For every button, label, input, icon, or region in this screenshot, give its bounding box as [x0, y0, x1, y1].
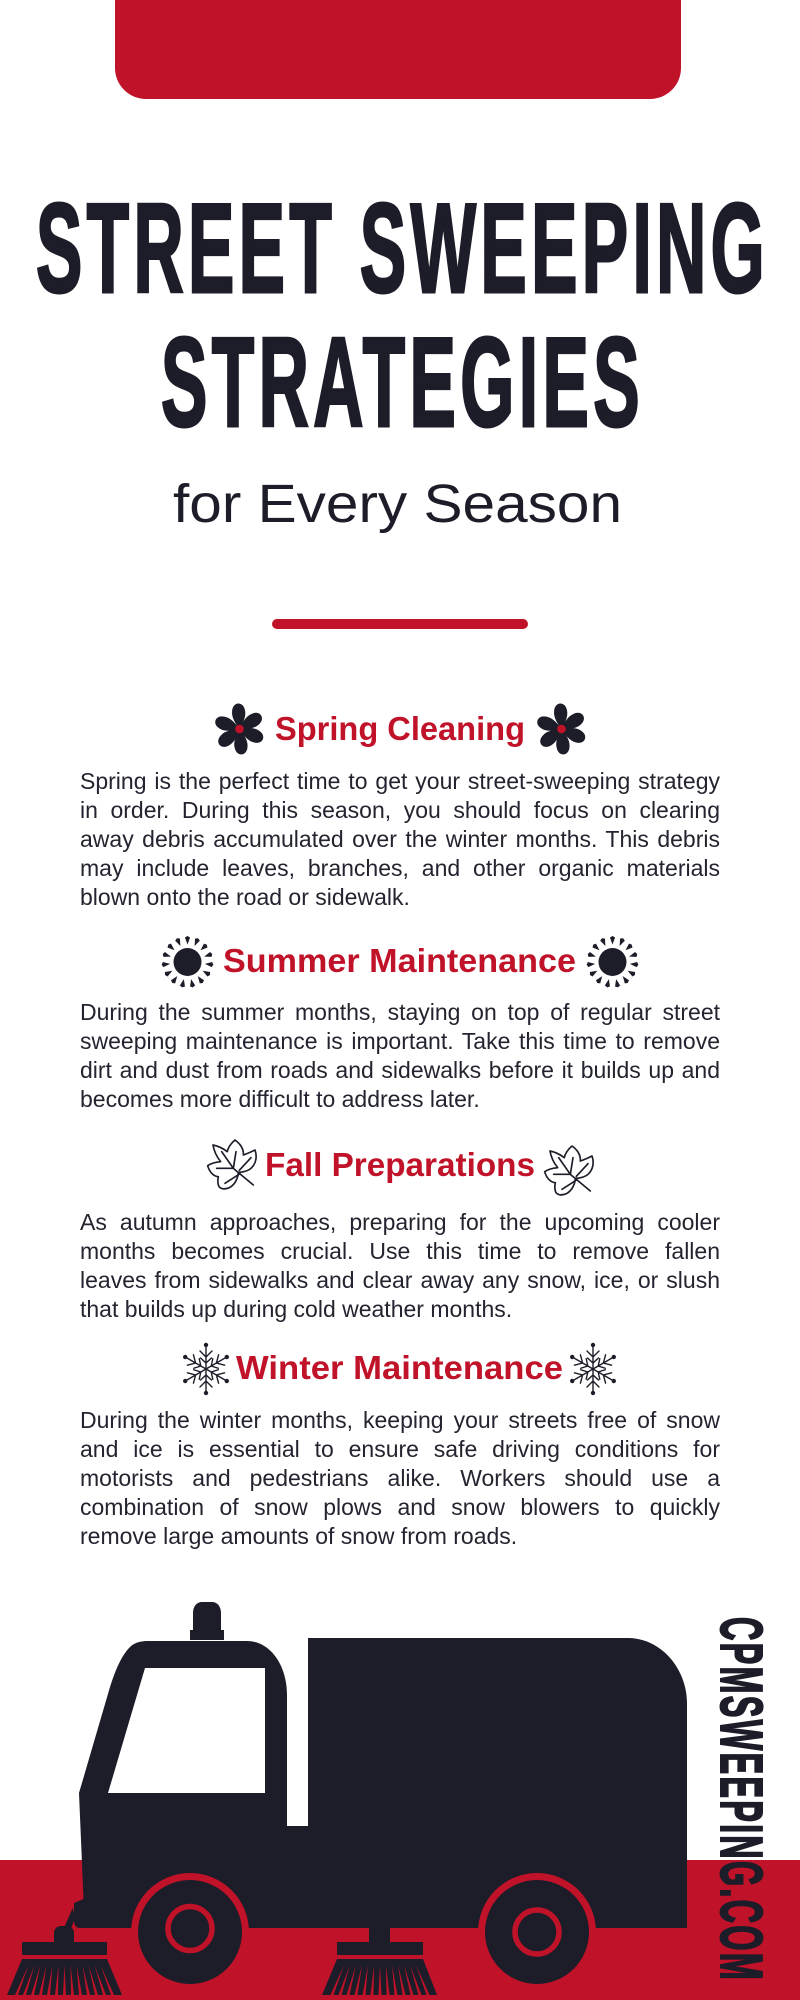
text block: fall: leaves from sidewalks and clear away any snow, ice, or slush	[80, 1267, 720, 1293]
icon: leaf right	[545, 1146, 593, 1195]
icon: sun right	[586, 936, 639, 988]
heading: Spring Cleaning: Spring Cleaning	[275, 710, 525, 747]
truck beacon	[190, 1602, 224, 1640]
middle brush	[322, 1926, 437, 1995]
text block: summer: sweeping maintenance is important. Take this time to remove	[80, 1028, 720, 1054]
title	[36, 177, 769, 453]
icon: snowflake right	[567, 1343, 619, 1395]
subtitle: for Every Season	[173, 474, 622, 534]
text block: winter: combination of snow plows and snow blowers to quickly	[80, 1494, 720, 1520]
text block: spring: in order. During this season, you should focus on clearing	[80, 797, 720, 823]
heading: Summer Maintenance: Summer Maintenance	[223, 942, 576, 979]
icon: flower right	[535, 703, 588, 755]
text block: summer: dirt and dust from roads and sidewalks before it builds up and	[80, 1057, 720, 1083]
heading: Winter Maintenance: Winter Maintenance	[236, 1349, 563, 1386]
text block: fall: that builds up during cold weather months.	[80, 1296, 512, 1322]
icon: flower left	[213, 703, 266, 755]
icon: snowflake left	[180, 1343, 232, 1395]
sweeper truck	[7, 1602, 687, 1995]
top red tab	[115, 0, 681, 99]
text block: winter	[80, 1407, 720, 1549]
text block: winter: remove large amounts of snow from roads.	[80, 1523, 517, 1549]
text block: fall: As autumn approaches, preparing for the upcoming cooler	[80, 1209, 720, 1235]
front wheel	[131, 1873, 249, 1991]
text block: spring: away debris accumulated over the winter months. This debris	[80, 826, 720, 852]
text block: summer: During the summer months, staying on top of regular street	[80, 999, 720, 1025]
text block: spring: may include leaves, branches, and other organic materials	[80, 855, 720, 881]
icon: sun left	[161, 936, 214, 988]
text block: spring: Spring is the perfect time to get your street-sweeping strategy	[80, 768, 720, 794]
red ground band	[0, 1860, 800, 2000]
text block: spring: blown onto the road or sidewalk.	[80, 884, 410, 910]
text block: winter: During the winter months, keeping your streets free of snow	[80, 1407, 720, 1433]
text block: winter: and ice is essential to ensure safe driving conditions for	[80, 1436, 720, 1462]
text block: winter: motorists and pedestrians alike. Workers should use a	[80, 1465, 720, 1491]
text block: fall: months becomes crucial. Use this time to remove fallen	[80, 1238, 720, 1264]
divider	[272, 619, 528, 629]
heading: Fall Preparations: Fall Preparations	[265, 1146, 535, 1183]
text block: spring	[80, 768, 720, 910]
text block: summer: becomes more difficult to address later.	[80, 1086, 480, 1112]
truck body and cab	[74, 1638, 687, 1928]
icon: leaf left	[208, 1140, 256, 1189]
text block: fall	[80, 1209, 720, 1322]
rear wheel	[478, 1873, 596, 1991]
front brush	[7, 1908, 122, 1995]
text block: summer	[80, 999, 720, 1112]
